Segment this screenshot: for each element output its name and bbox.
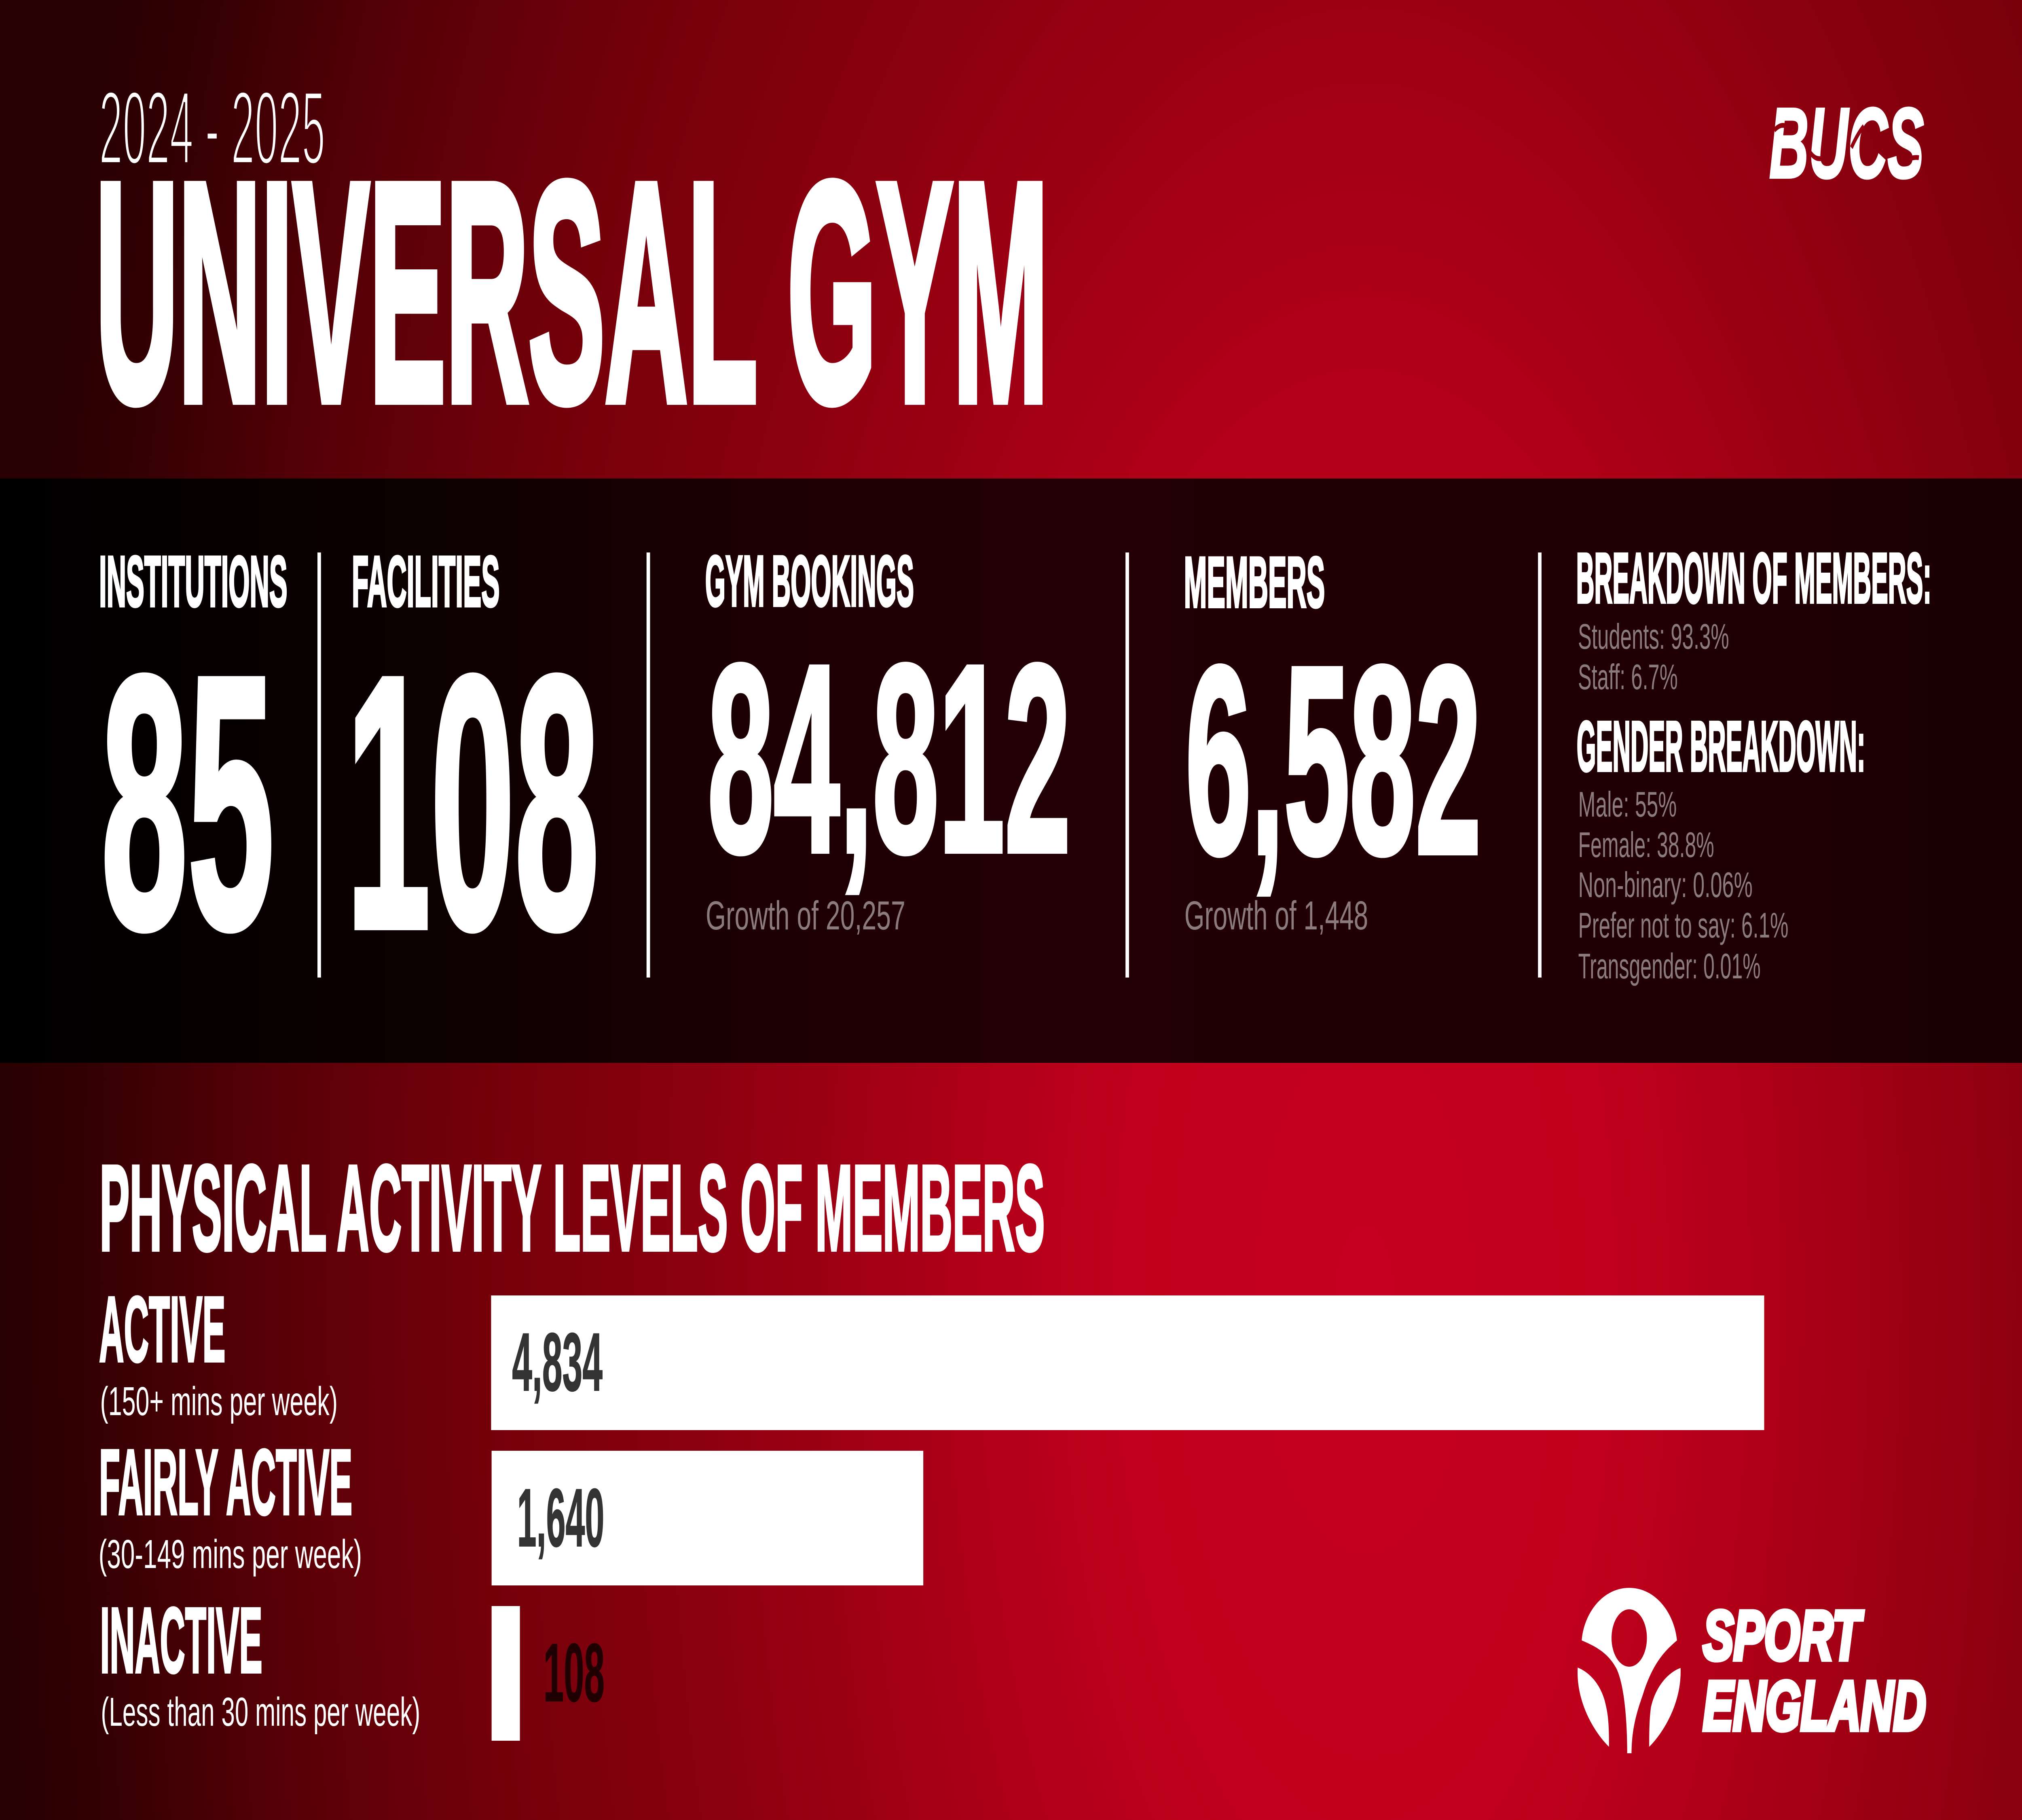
- row: fairly active: FAIRLY ACTIVE: [99, 1430, 352, 1534]
- logo: Sport England: ENGLAND: [1703, 1667, 1926, 1745]
- row: active: [99, 1277, 1764, 1430]
- wordmark: SPORT: [1703, 1597, 1863, 1674]
- row: active: (150+ mins per week): [100, 1379, 338, 1424]
- title: UNIVERSAL GYM: [95, 119, 1048, 466]
- breakdown of members: Students: 93.3%: [1578, 617, 1729, 656]
- stat: gym bookings: GYM BOOKINGS: [705, 541, 914, 621]
- breakdown of members: [1576, 538, 1931, 697]
- stat: gym bookings: Growth of 20,257: [706, 893, 905, 938]
- row: fairly active: 1,640: [517, 1472, 604, 1564]
- stat: institutions: [99, 542, 288, 1003]
- row: inactive: (Less than 30 mins per week): [101, 1689, 420, 1735]
- row: fairly active: (30-149 mins per week): [99, 1532, 362, 1577]
- divider 4: [1538, 552, 1542, 978]
- stats band: [0, 478, 2022, 1063]
- stat: members: [1184, 542, 1481, 938]
- stat: institutions: 85: [101, 601, 274, 1003]
- row: inactive: 108: [544, 1627, 605, 1719]
- stat: members: 6,582: [1185, 611, 1481, 909]
- divider 1: [317, 552, 321, 978]
- stat: members: MEMBERS: [1184, 542, 1325, 622]
- gender breakdown: Female: 38.8%: [1578, 825, 1714, 865]
- header panel: [95, 69, 1048, 466]
- divider 2: [647, 552, 650, 978]
- gender breakdown: Non-binary: 0.06%: [1578, 865, 1753, 905]
- stat: facilities: FACILITIES: [352, 542, 500, 622]
- gender breakdown: Transgender: 0.01%: [1578, 946, 1761, 986]
- divider 3: [1125, 552, 1129, 978]
- breakdown of members: BREAKDOWN OF MEMBERS:: [1576, 538, 1931, 618]
- stat: facilities: 108: [346, 601, 599, 1003]
- logo: BUCS: BUCS: [1769, 87, 1924, 199]
- icon: figure: [1578, 1588, 1681, 1753]
- gender breakdown: [1577, 707, 1865, 986]
- row: inactive: INACTIVE: [100, 1588, 262, 1692]
- stat: members: Growth of 1,448: [1184, 893, 1368, 938]
- stat: gym bookings: [705, 541, 1071, 938]
- activity heading: PHYSICAL ACTIVITY LEVELS OF MEMBERS: [99, 1140, 1045, 1276]
- logo: Sport England: [1578, 1588, 1926, 1753]
- row: active: 4,834: [512, 1316, 603, 1408]
- breakdown of members: Staff: 6.7%: [1578, 657, 1678, 697]
- stat: gym bookings: 84,812: [708, 609, 1071, 908]
- gender breakdown: Prefer not to say: 6.1%: [1578, 906, 1789, 945]
- stat: facilities: [346, 542, 599, 1003]
- row: inactive: [100, 1588, 605, 1741]
- row: active: ACTIVE: [99, 1277, 226, 1381]
- season label: 2024 - 2025: [99, 69, 325, 186]
- stat: institutions: INSTITUTIONS: [99, 542, 288, 622]
- row: fairly active: [99, 1430, 923, 1585]
- gender breakdown: Male: 55%: [1578, 785, 1677, 824]
